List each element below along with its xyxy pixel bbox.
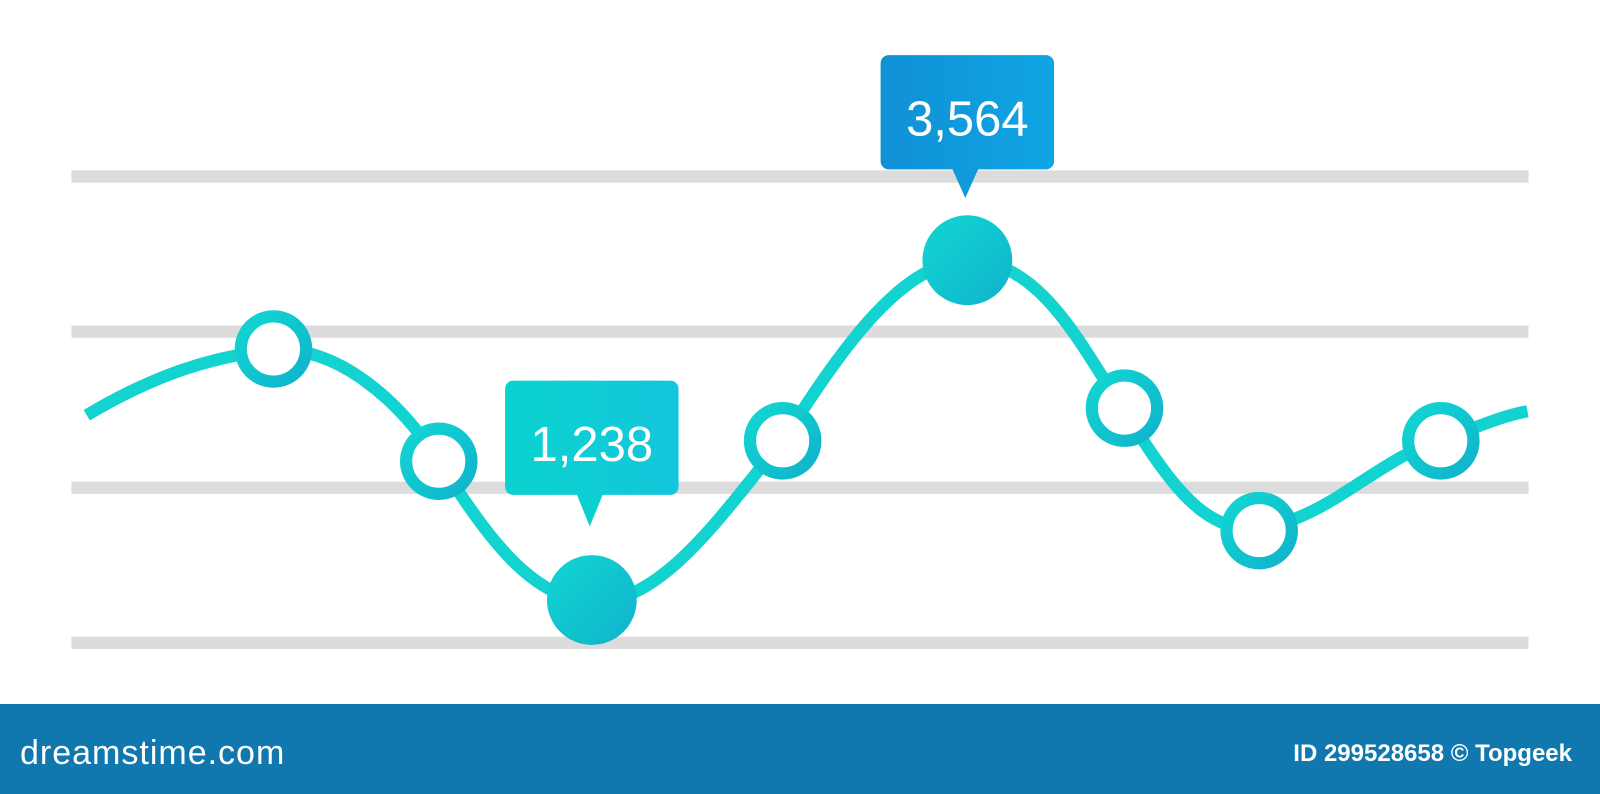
footer bar — [0, 704, 1600, 794]
callout: 3,564 — [881, 55, 1054, 198]
callout: 1,238: 1,238 — [531, 418, 653, 472]
callout: 3,564: 3,564 — [906, 93, 1029, 147]
callout: 1,238 — [505, 381, 679, 527]
footer logo: dreamstime.com — [20, 734, 285, 772]
curve — [87, 260, 1528, 602]
highlighted points — [547, 215, 1012, 645]
data points — [241, 316, 1473, 563]
footer credit: ID 299528658 © Topgeek — [1293, 740, 1572, 767]
